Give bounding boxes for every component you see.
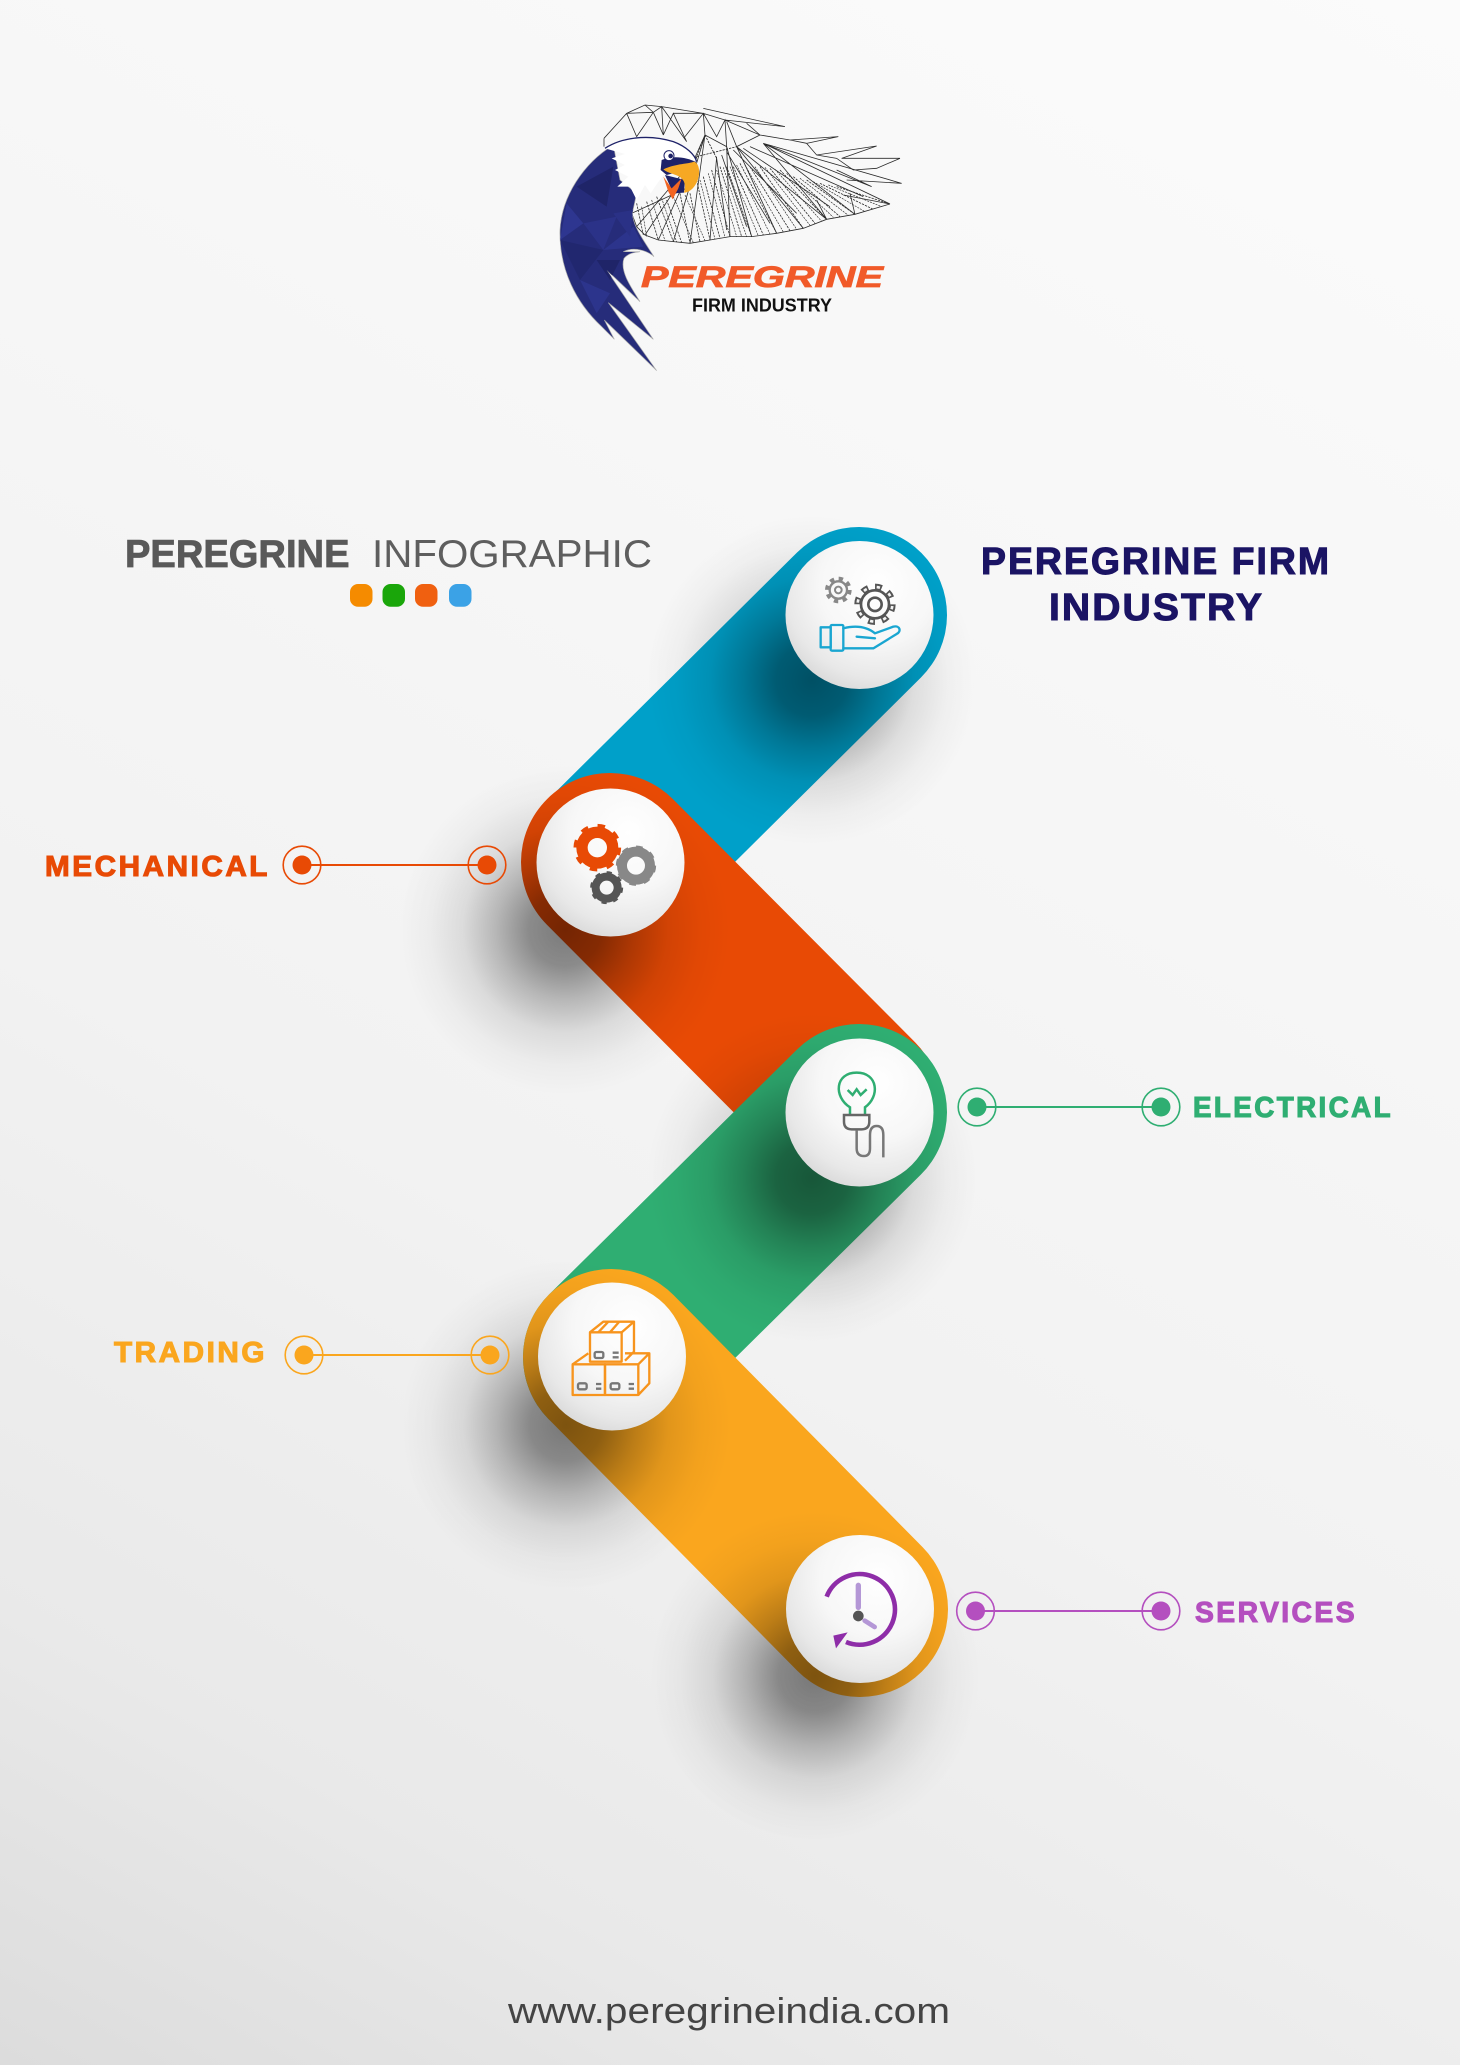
chevron band: blue [610, 515, 977, 862]
heading: Peregrine Firm Industry: INDUSTRY [1049, 587, 1264, 629]
sphere with icon: light bulb [786, 1038, 934, 1186]
label: Trading [114, 1336, 509, 1374]
chevron band: green [611, 1013, 977, 1357]
label: Trading: TRADING [114, 1337, 267, 1369]
sphere with icon: three gears [536, 788, 684, 936]
heading: Peregrine Firm Industry [981, 541, 1331, 629]
sphere with icon: stacked boxes [538, 1282, 686, 1430]
heading: Peregrine Infographic: PEREGRINE [125, 533, 350, 576]
label: Mechanical: MECHANICAL [45, 851, 270, 883]
chevron band: orange-red [400, 765, 852, 1105]
eagle head [605, 137, 699, 200]
label: Electrical [958, 1088, 1393, 1126]
eagle body [560, 145, 657, 371]
sphere with icon: gears in hand [786, 541, 934, 689]
footer: website URL: www.peregrineindia.com [507, 1990, 950, 2031]
label: Mechanical [45, 846, 506, 884]
logo wordmark: PEREGRINE [641, 261, 884, 294]
eagle wing wireframe [604, 105, 902, 243]
label: Services: SERVICES [1195, 1597, 1357, 1629]
heading: Peregrine Infographic: INFOGRAPHIC [372, 533, 652, 576]
logo subtitle: FIRM INDUSTRY [692, 296, 832, 316]
label: Services [957, 1592, 1357, 1630]
chevron band: amber [401, 1260, 980, 1841]
sphere with icon: clock with arrow [786, 1535, 934, 1683]
label: Electrical: ELECTRICAL [1193, 1092, 1393, 1124]
logo: Peregrine eagle [560, 105, 902, 371]
heading: Peregrine Infographic [125, 533, 652, 576]
heading: Peregrine Firm Industry: PEREGRINE FIRM [981, 541, 1331, 583]
heading colour dots [350, 584, 472, 607]
